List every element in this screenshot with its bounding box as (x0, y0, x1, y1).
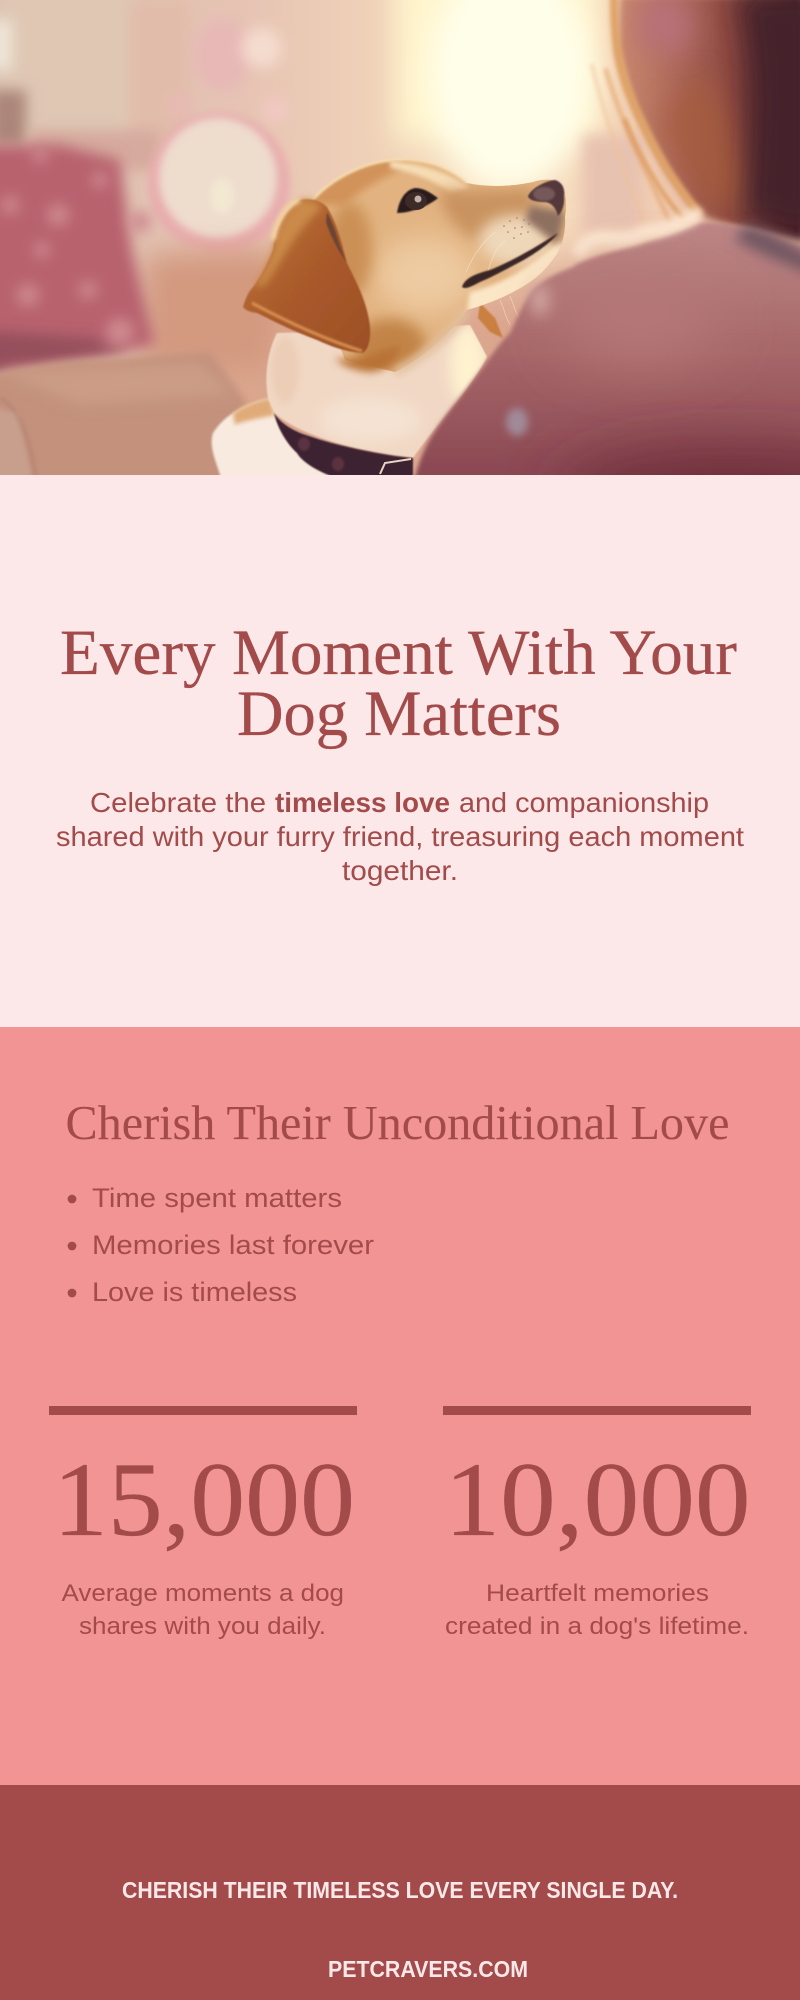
far ear (478, 303, 503, 338)
pillow (0, 145, 155, 375)
ruff shadow under ear (335, 345, 400, 372)
hair (592, 0, 800, 240)
stat: 15,000 moments (49, 1406, 357, 1640)
muzzle whisker dots (503, 217, 530, 239)
intro paragraph: Celebrate the (90, 787, 266, 818)
intro paragraph (56, 787, 744, 886)
intro paragraph: shared with your furry friend, treasuring each moment (56, 821, 744, 852)
intro paragraph: timeless love (275, 787, 450, 818)
stat: 10,000 memories: Heartfelt memories (486, 1580, 709, 1607)
rim light on crown (313, 160, 467, 200)
dog (212, 158, 570, 482)
title: Dog Matters (237, 678, 561, 750)
section heading: Cherish Their Unconditional Love (66, 1095, 730, 1150)
stat: 10,000 memories: created in a dog's lifetime. (445, 1613, 749, 1640)
background flowers (168, 19, 287, 122)
sweater (412, 215, 800, 550)
eye (397, 188, 438, 213)
panel: intro (56, 617, 744, 886)
dog back fur (212, 398, 335, 482)
title (60, 617, 737, 750)
clock (148, 113, 290, 253)
sofa (0, 352, 245, 495)
stat: 10,000 memories (443, 1406, 751, 1640)
intro paragraph: together. (342, 855, 458, 886)
mouth (462, 233, 558, 288)
stat: 15,000 moments: shares with you daily. (79, 1613, 326, 1640)
closing message: CHERISH THEIR TIMELESS LOVE EVERY SINGLE DAY. (122, 1877, 678, 1903)
panel: unconditional love (0, 1027, 800, 1785)
background room (0, 0, 800, 500)
bullet list: Time spent matters (92, 1183, 342, 1213)
title: Every Moment With Your (60, 617, 737, 689)
website: PETCRAVERS.COM (328, 1956, 528, 1982)
panel: footer (0, 1785, 800, 2000)
whiskers (466, 232, 520, 325)
dog head (300, 158, 570, 372)
panel: hero photo of dog and owner (0, 0, 800, 475)
soft neck transition (395, 310, 467, 372)
bullet list: Love is timeless (92, 1277, 297, 1307)
nose (528, 180, 564, 216)
stat: 15,000 moments: 15,000 (53, 1441, 355, 1558)
intro paragraph: and companionship (459, 787, 709, 818)
ear (243, 199, 370, 353)
stat: 15,000 moments: Average moments a dog (62, 1580, 344, 1607)
cabinet (145, 250, 275, 370)
bullet list: Memories last forever (92, 1230, 374, 1260)
collar (274, 413, 413, 478)
bullet list (68, 1183, 374, 1307)
dog chest (266, 325, 487, 458)
stat: 10,000 memories: 10,000 (444, 1441, 750, 1558)
